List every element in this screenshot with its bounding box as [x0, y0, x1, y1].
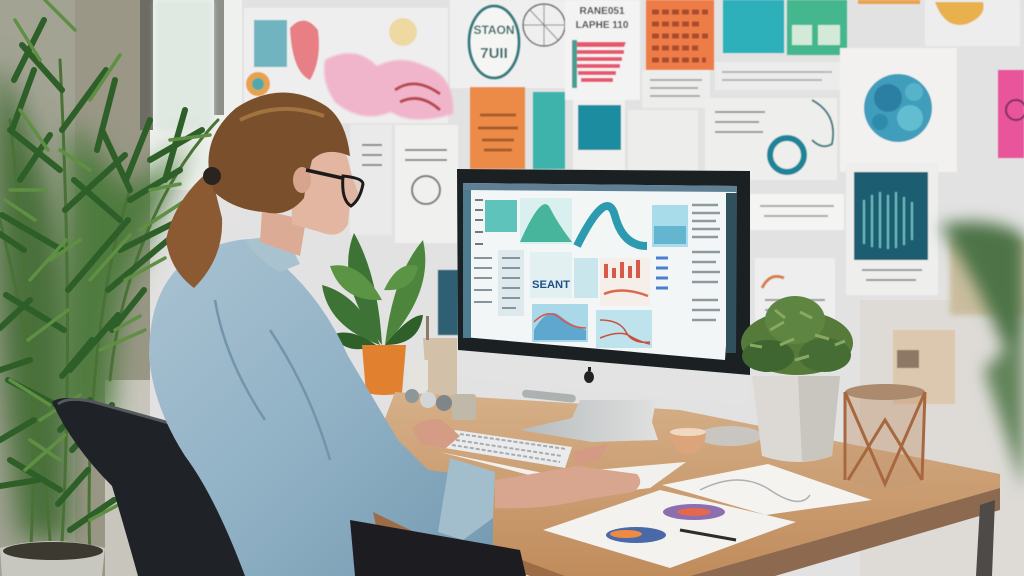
screen line chart	[596, 310, 652, 348]
poster: speech bubble: 7UII	[480, 45, 508, 62]
monitor stand	[520, 400, 658, 442]
poster: striped chart	[565, 0, 640, 100]
paper: sketch	[662, 464, 872, 515]
lens objects on desk	[405, 389, 576, 420]
poster: teal swirl	[533, 92, 565, 169]
poster: tan note	[893, 330, 955, 404]
forearm and hand	[412, 419, 640, 508]
monitor bezel	[457, 169, 750, 406]
monitor	[457, 169, 750, 442]
plant leaves	[322, 233, 425, 349]
desk	[352, 392, 1000, 576]
white pot	[752, 376, 840, 462]
poster: pink	[998, 70, 1024, 158]
hair	[208, 92, 350, 213]
plant pot: left	[0, 541, 105, 576]
papers on desk	[440, 452, 872, 568]
poster: gold splash	[925, 0, 1020, 46]
window and curtain	[0, 0, 242, 576]
chair	[52, 398, 246, 576]
poster: speech bubble	[450, 0, 566, 88]
screen chart: green wave	[520, 198, 572, 244]
small desk plant with orange pot	[322, 233, 425, 395]
paper: with colored blobs	[543, 490, 796, 568]
ponytail	[166, 170, 222, 288]
poster: text strip	[715, 62, 840, 90]
apple logo	[584, 367, 594, 383]
screen infographic text: SEANT	[532, 279, 570, 291]
poster: blue strip behind plant	[438, 270, 458, 335]
poster: caption strip	[642, 70, 710, 108]
copper geometric holder	[845, 384, 925, 489]
poster: teal	[723, 0, 784, 53]
screen text block left	[474, 250, 524, 316]
screen chart: blue wave	[575, 199, 648, 249]
right potted plant	[741, 296, 853, 462]
poster: orange middle	[470, 87, 525, 169]
poster: orange top	[646, 0, 714, 70]
poster: teal box	[573, 100, 625, 170]
screen list	[656, 258, 668, 288]
left dark trousers	[350, 520, 526, 576]
hair tie	[203, 167, 221, 185]
poster: note under circles	[750, 194, 844, 230]
glasses	[306, 170, 363, 206]
plant: large left palm	[0, 0, 218, 576]
panel: wall of posters	[244, 0, 1024, 404]
orange pot	[362, 345, 406, 395]
keyboard	[445, 430, 572, 468]
poster: left columns	[350, 125, 458, 243]
poster: top left sketches	[244, 8, 453, 123]
poster: striped chart: RANE051	[579, 6, 625, 17]
ear	[293, 167, 311, 193]
monitor screen	[463, 183, 737, 360]
poster: blue cell cluster	[840, 48, 957, 172]
screen infographic text	[530, 252, 572, 298]
woman	[149, 92, 640, 576]
screen area chart	[532, 304, 588, 342]
screen chart: small panel	[652, 205, 688, 247]
blurred foreground plant	[940, 222, 1024, 490]
poster: arc chart	[755, 258, 835, 328]
neck	[260, 210, 306, 256]
screen chart: teal bars	[475, 200, 517, 244]
poster: striped chart: LAPHE 110	[576, 20, 629, 31]
cup and desk objects by monitor	[408, 316, 457, 396]
poster: speech bubble: STAON	[473, 23, 515, 37]
poster: circles	[705, 98, 837, 180]
torso and shirt	[149, 234, 495, 576]
poster: faded right	[950, 240, 1024, 315]
coffee cup	[670, 426, 762, 455]
screen text column	[692, 205, 720, 320]
poster: dark teal	[846, 163, 938, 295]
face	[290, 128, 360, 235]
paper: under keyboard	[440, 452, 686, 494]
poster: blank note	[628, 110, 698, 170]
screen bars	[574, 258, 650, 306]
poster: green	[787, 0, 847, 55]
